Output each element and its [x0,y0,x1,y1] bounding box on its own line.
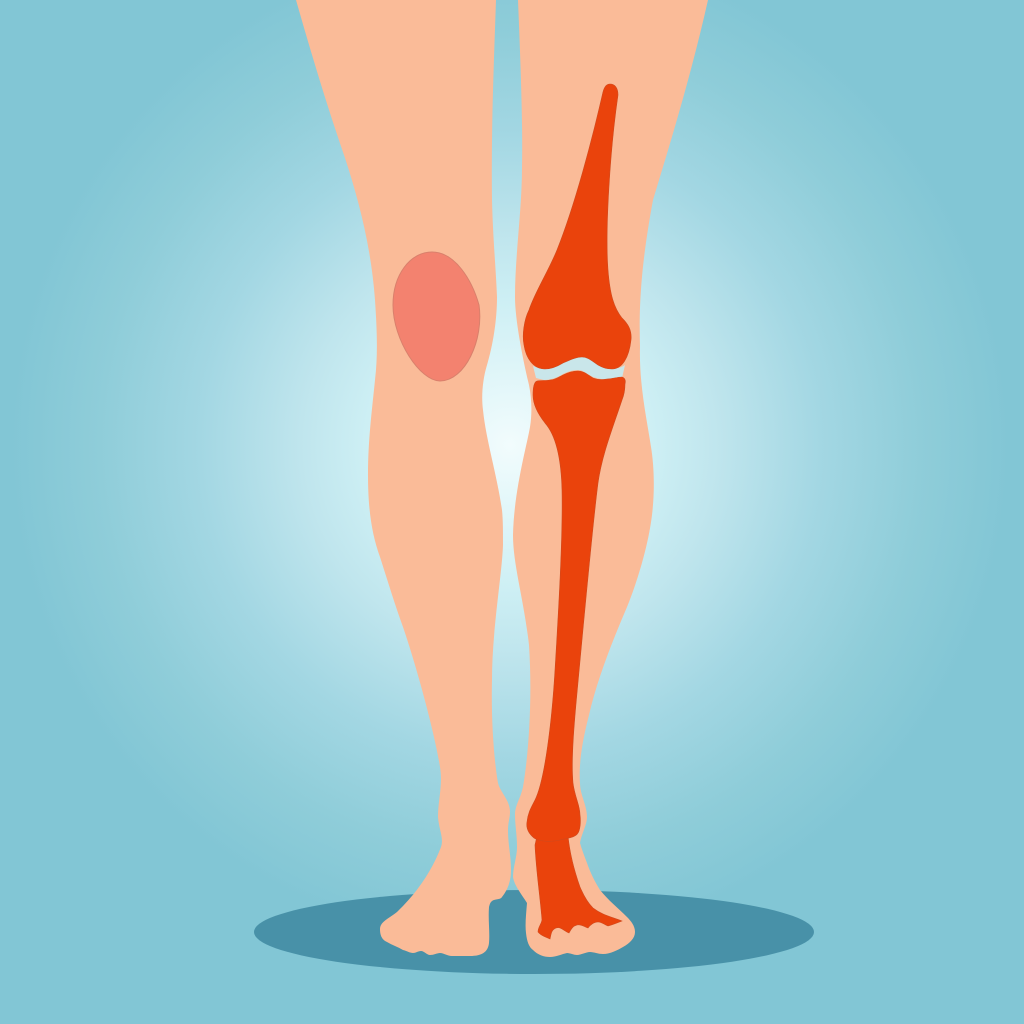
foot bones [535,836,622,939]
tibia [527,371,625,841]
left leg [296,0,511,956]
bones [523,84,631,939]
knee joint cartilage [533,355,625,380]
femur [523,84,631,369]
ground shadow [254,890,814,974]
right leg [513,0,708,957]
reddened knee patch [393,252,480,381]
